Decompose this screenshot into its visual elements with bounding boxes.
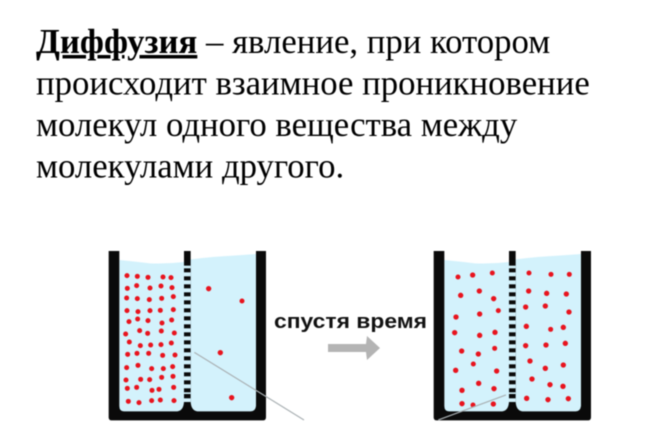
particles in the left vessel [123, 273, 244, 405]
right vessel: after diffusion [434, 251, 591, 420]
definition text [36, 22, 590, 186]
left vessel: before diffusion [109, 251, 304, 420]
particles in the right vessel [452, 270, 572, 407]
pointer line, right vessel [438, 395, 506, 420]
definition text: молекулами другого. [36, 146, 344, 186]
pointer line, left vessel [194, 352, 304, 420]
caption: after some time: спустя время [274, 311, 427, 333]
definition text: молекул одного вещества между [36, 105, 518, 144]
arrow [328, 336, 380, 360]
definition text: происходит взаимное проникновение [36, 64, 590, 102]
definition text: Диффузия – явление, при котором [36, 22, 550, 61]
